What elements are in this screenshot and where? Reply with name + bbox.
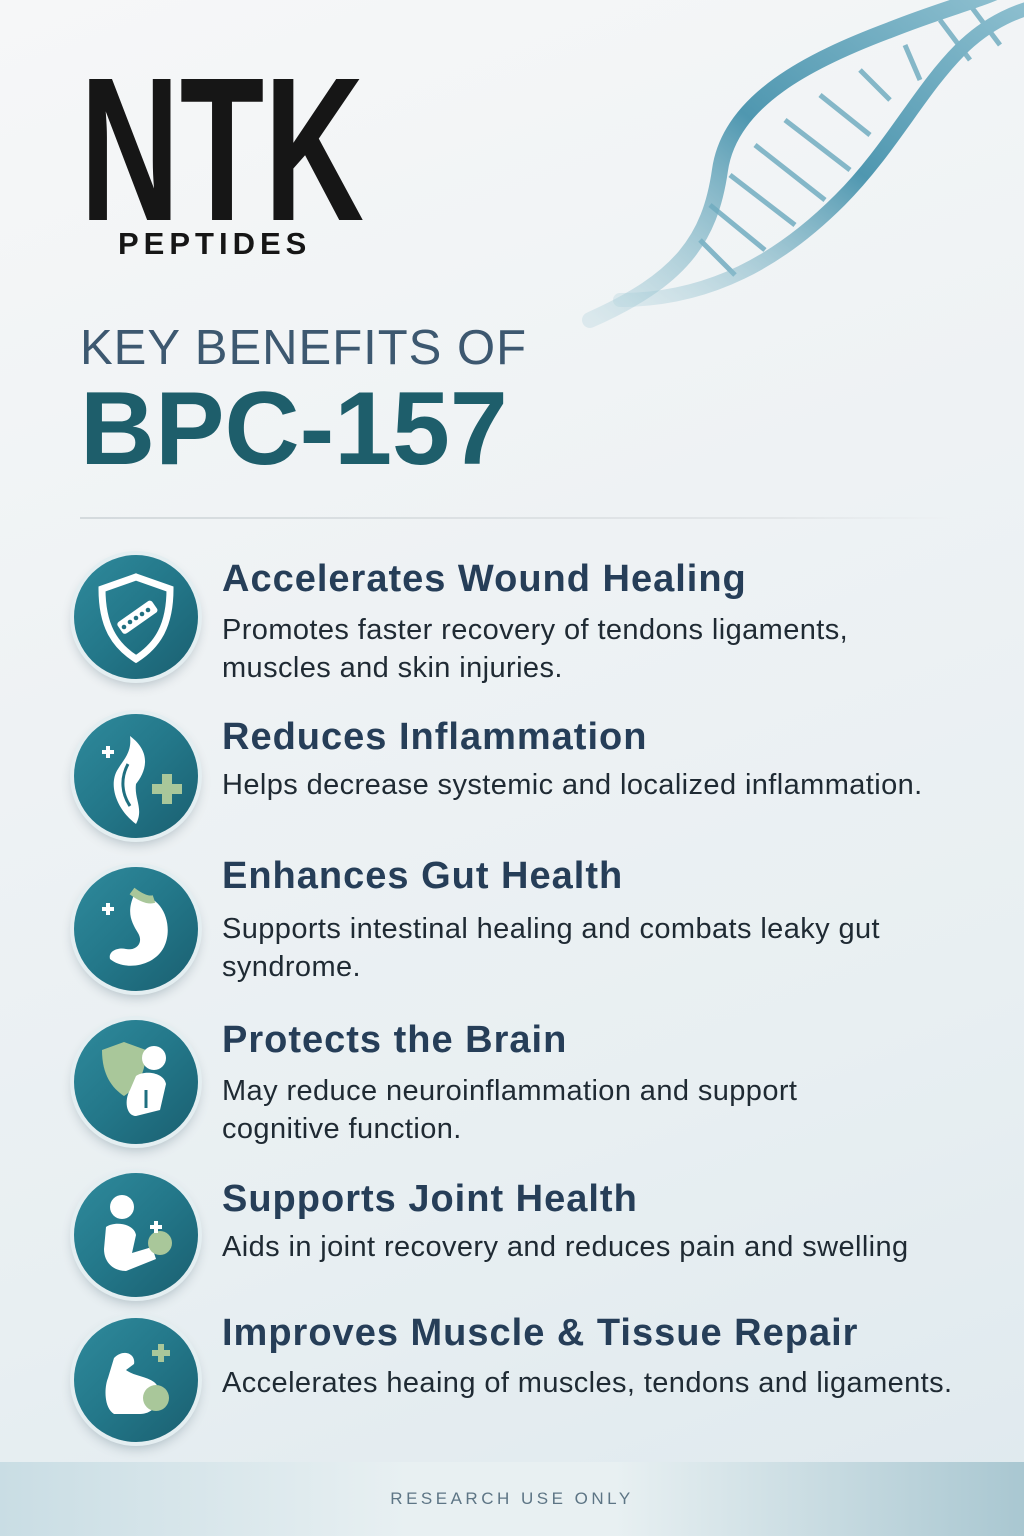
icon: joint person [74,1173,198,1297]
benefit 1: Accelerates Wound Healing [222,558,747,600]
benefit 2: Helps decrease systemic and localized inflammation. [222,769,923,801]
benefit 3 [68,855,880,1003]
icon: stomach [74,867,198,991]
benefit 1 [68,551,848,691]
benefit 4: May reduce neuroinflammation and support [222,1075,797,1107]
benefit 6: Accelerates heaing of muscles, tendons and ligaments. [222,1367,952,1399]
benefit 3: Supports intestinal healing and combats leaky gut [222,913,880,945]
benefit 1: Promotes faster recovery of tendons ligaments, [222,614,848,646]
logo: PEPTIDES [118,226,311,261]
benefit 1: muscles and skin injuries. [222,652,563,684]
benefit 5: Supports Joint Health [222,1178,638,1220]
benefit 5: Aids in joint recovery and reduces pain and swelling [222,1231,909,1263]
background dna helix [582,0,1024,328]
icon: muscle [74,1318,198,1442]
icon: shield [74,555,198,679]
benefit 3: syndrome. [222,951,361,983]
benefit 6: Improves Muscle & Tissue Repair [222,1312,858,1354]
benefit 3: Enhances Gut Health [222,855,623,897]
icon: brain/person shield [74,1020,198,1144]
title: BPC-157 [80,371,508,487]
icon: flame [74,714,198,838]
benefit 4: Protects the Brain [222,1019,567,1061]
benefit 5 [68,1173,909,1309]
benefit 2 [68,710,923,850]
footer band [0,1462,1024,1536]
footer text: RESEARCH USE ONLY [390,1489,634,1508]
benefit 4: cognitive function. [222,1113,462,1145]
benefit 6 [68,1312,952,1454]
benefit 2: Reduces Inflammation [222,716,647,758]
title: KEY BENEFITS OF [80,321,527,375]
title [80,321,527,487]
benefit 4 [68,1019,797,1156]
